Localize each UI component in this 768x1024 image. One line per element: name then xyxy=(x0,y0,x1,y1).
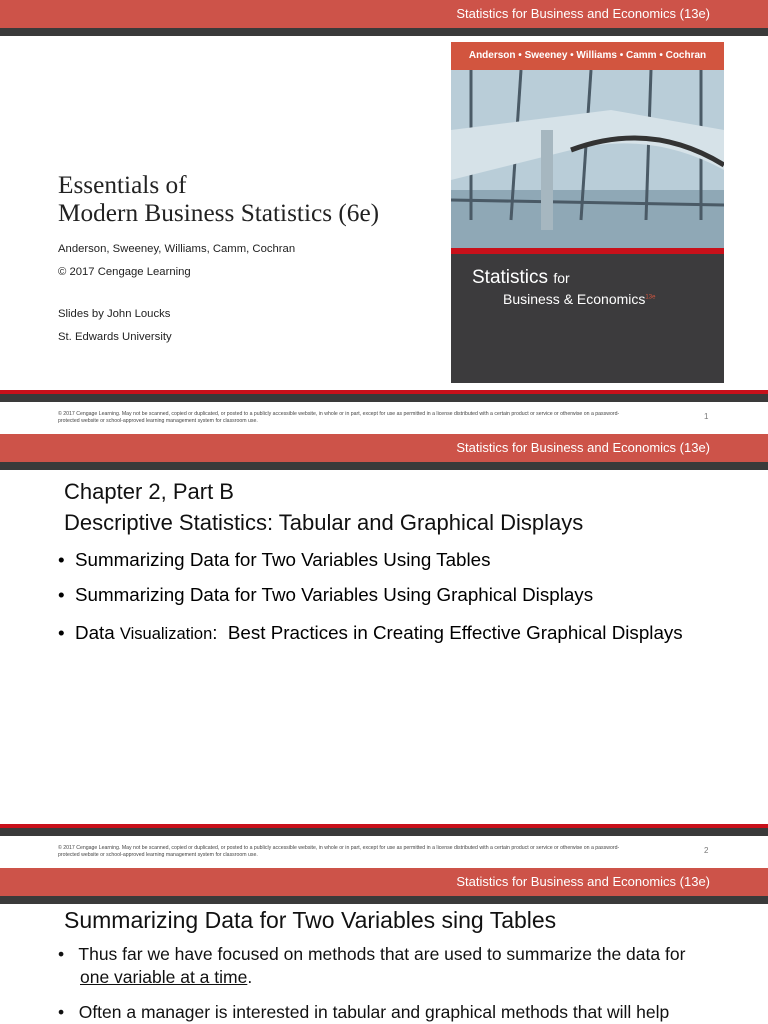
copyright slide 2: © 2017 Cengage Learning. May not be scanned, copied or duplicated, or posted to a publicly accessible website, in whole or in part, except for use as permitted in a license distributed with a certain product or service or otherwise on a password-protected website or school-approved learning management system for classroom use. xyxy=(58,845,619,858)
title slide 1: Essentials of xyxy=(58,171,187,199)
slide credits: Slides by John Loucks xyxy=(58,308,170,320)
heading slide 2 xyxy=(64,479,583,535)
heading slide 2: Chapter 2, Part B xyxy=(64,479,234,504)
authors xyxy=(58,243,295,278)
header bar slide 3 xyxy=(0,868,768,904)
slide credits: St. Edwards University xyxy=(58,331,172,343)
bullet list slide 2: • Summarizing Data for Two Variables Using Graphical Displays xyxy=(58,584,593,605)
footer bar slide 2 xyxy=(0,824,768,836)
authors: © 2017 Cengage Learning xyxy=(58,266,191,278)
header bar slide 2 xyxy=(0,434,768,470)
slide credits xyxy=(58,308,172,343)
bullet list slide 2: • Data Visualization: Best Practices in Creating Effective Graphical Displays xyxy=(58,622,683,643)
copyright slide 1: © 2017 Cengage Learning. May not be scanned, copied or duplicated, or posted to a publicly accessible website, in whole or in part, except for use as permitted in a license distributed with a certain product or service or otherwise on a password-protected website or school-approved learning management system for classroom use. xyxy=(58,411,619,424)
title slide 1 xyxy=(58,171,379,227)
book cover: Business & Economics13e xyxy=(503,291,655,307)
bullet list slide 2 xyxy=(58,549,683,643)
page number 1: 1 xyxy=(704,412,708,421)
book cover xyxy=(451,42,724,383)
heading slide 2: Descriptive Statistics: Tabular and Graphical Displays xyxy=(64,510,583,535)
header bar slide 2: Statistics for Business and Economics (13e) xyxy=(456,440,710,455)
bullets slide 3: • Thus far we have focused on methods that are used to summarize the data for one variable at a time. xyxy=(58,944,685,987)
page number 2: 2 xyxy=(704,846,708,855)
book cover: Anderson • Sweeney • Williams • Camm • Cochran xyxy=(469,50,706,61)
header bar slide 1: Statistics for Business and Economics (13e) xyxy=(456,6,710,21)
footer bar slide 1 xyxy=(0,390,768,402)
bullets slide 3: • Often a manager is interested in tabular and graphical methods that will help xyxy=(58,1002,669,1022)
header bar slide 1 xyxy=(0,0,768,36)
title slide 1: Modern Business Statistics (6e) xyxy=(58,199,379,227)
bullets slide 3 xyxy=(58,944,686,1022)
book cover: Statistics for xyxy=(472,267,570,288)
bullet list slide 2: • Summarizing Data for Two Variables Using Tables xyxy=(58,549,490,570)
heading slide 3: Summarizing Data for Two Variables sing Tables xyxy=(64,907,556,933)
header bar slide 3: Statistics for Business and Economics (13e) xyxy=(456,874,710,889)
authors: Anderson, Sweeney, Williams, Camm, Cochran xyxy=(58,243,295,255)
